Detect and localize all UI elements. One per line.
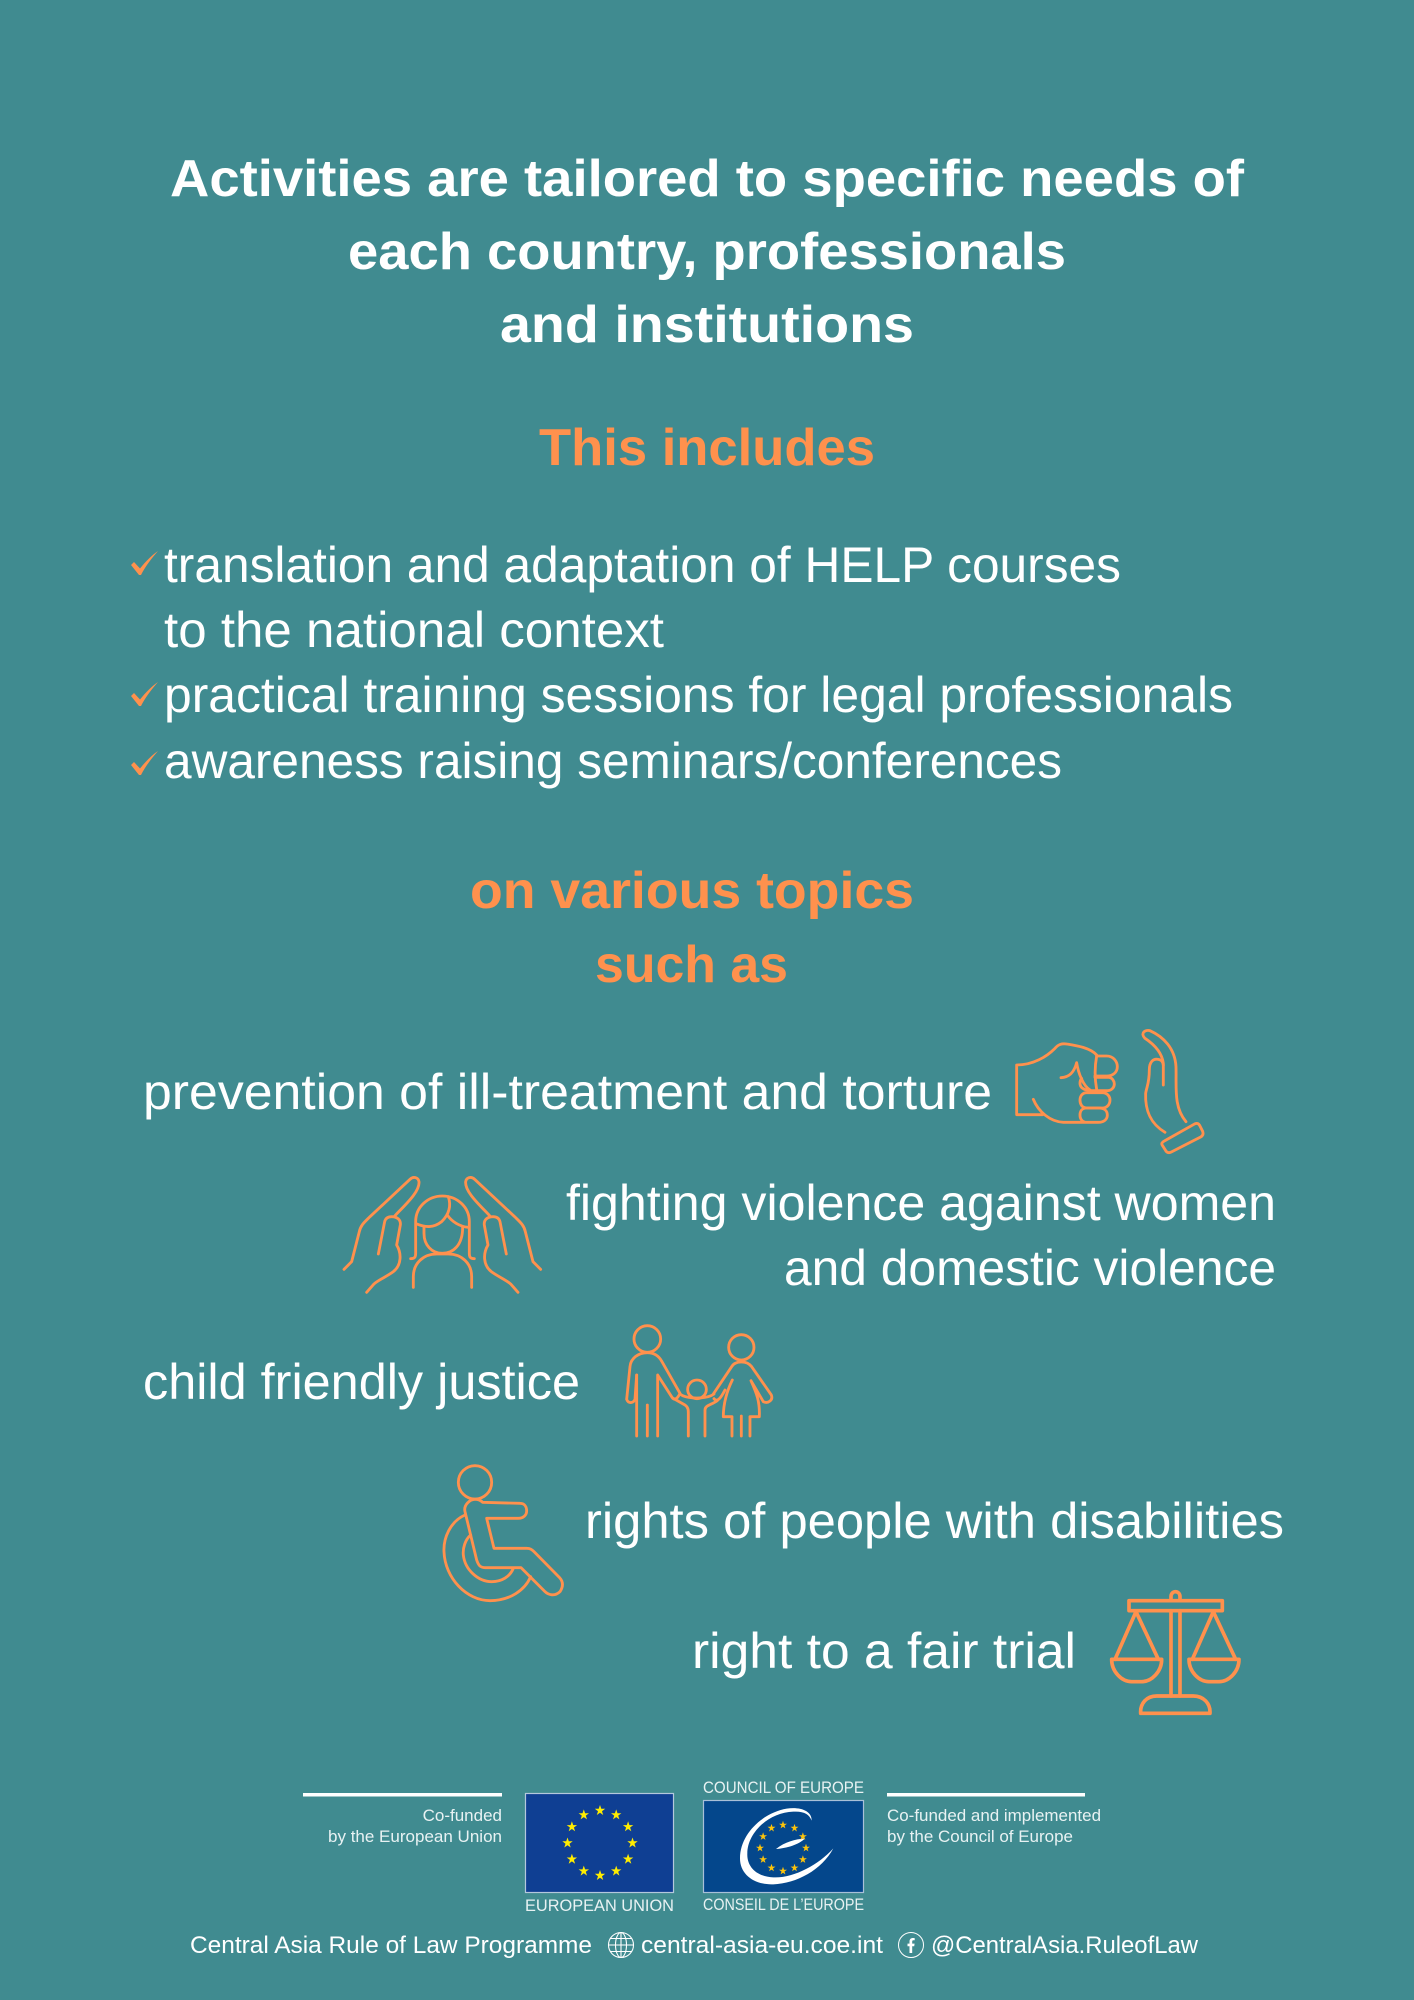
topic: rights of people with disabilities: rights of people with disabilities	[585, 1493, 1284, 1549]
heading: this includes: This includes	[539, 419, 875, 477]
topic: right to a fair trial: right to a fair trial	[692, 1623, 1076, 1679]
icon: facebook	[898, 1932, 924, 1958]
icon: check mark 1	[131, 551, 158, 575]
title: Activities are tailored to specific needs of	[170, 150, 1245, 208]
icon: woman protected by hands	[344, 1177, 541, 1292]
list item 3: awareness raising seminars/conferences	[164, 733, 1062, 789]
icon: wheelchair user	[444, 1466, 562, 1601]
icon: scales of justice	[1112, 1592, 1239, 1713]
icon: check mark 3	[131, 751, 158, 775]
footer	[190, 1932, 1199, 1959]
Council of Europe flag	[704, 1800, 864, 1892]
icon: globe	[608, 1932, 634, 1958]
rule and caption: co-funded by the EU	[303, 1793, 502, 1846]
label: Council of Europe: COUNCIL OF EUROPE	[703, 1778, 864, 1797]
programme name: Central Asia Rule of Law Programme	[190, 1932, 592, 1959]
list item 1	[164, 537, 1121, 658]
topic: fighting violence against women and domestic violence: and domestic violence	[784, 1240, 1276, 1296]
heading: on various topics such as: on various topics	[470, 862, 914, 920]
rule and caption: co-funded and implemented: Co-funded and implemented	[887, 1806, 1101, 1825]
social handle: @CentralAsia.RuleofLaw	[931, 1932, 1199, 1959]
title: each country, professionals	[348, 223, 1066, 281]
heading: on various topics such as	[470, 862, 914, 994]
list item 1: translation and adaptation of HELP courses	[164, 537, 1121, 593]
checklist	[131, 537, 1233, 789]
logo block: European Union	[303, 1793, 674, 1915]
topic: prevention of ill-treatment and torture: prevention of ill-treatment and torture	[143, 1064, 992, 1120]
label: Conseil de l'Europe: CONSEIL DE L’EUROPE	[703, 1895, 864, 1914]
rule and caption: co-funded and implemented	[887, 1793, 1101, 1846]
title	[170, 150, 1245, 354]
rule and caption: co-funded by the EU: Co-funded	[423, 1806, 502, 1825]
website: central-asia-eu.coe.int	[641, 1932, 883, 1959]
heading: on various topics such as: such as	[595, 936, 788, 994]
list item 1: to the national context	[164, 602, 664, 658]
topic: fighting violence against women and domestic violence	[566, 1175, 1276, 1296]
title: and institutions	[500, 296, 914, 354]
icon: family holding hands	[627, 1326, 772, 1436]
logo block: Council of Europe	[703, 1778, 1101, 1914]
rule and caption: co-funded by the EU: by the European Union	[328, 1827, 502, 1846]
topic: fighting violence against women and domestic violence: fighting violence against women	[566, 1175, 1276, 1231]
label: European Union: EUROPEAN UNION	[525, 1896, 674, 1915]
EU flag	[526, 1794, 674, 1892]
icon: check mark 2	[131, 682, 158, 706]
icon: fist and raised hand	[1017, 1030, 1203, 1153]
list item 2: practical training sessions for legal professionals	[164, 667, 1233, 723]
topic: child friendly justice: child friendly justice	[143, 1354, 580, 1410]
rule and caption: co-funded and implemented: by the Council of Europe	[887, 1827, 1073, 1846]
